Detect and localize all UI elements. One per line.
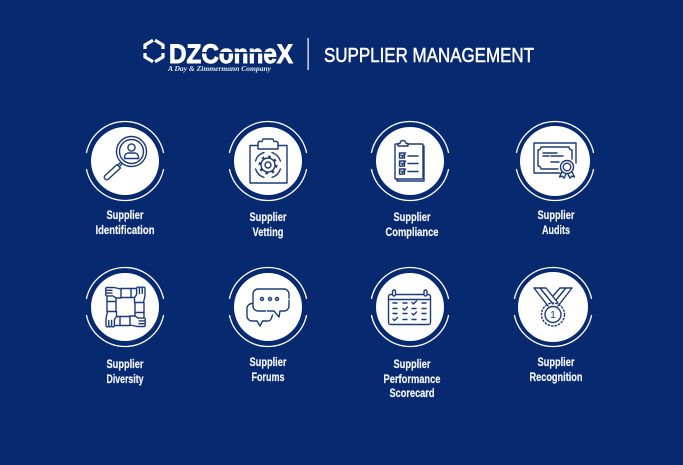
label [530,355,582,384]
label: Scorecard [390,386,434,400]
label: Recognition [530,370,582,384]
icon badge: clipboard with gear [229,121,307,201]
panel: supplier audits [516,121,594,237]
panel: supplier recognition [514,267,592,384]
panel: supplier performance scorecard [371,267,449,400]
label [106,357,144,386]
header: logo and title [145,38,534,73]
label [538,208,575,237]
panel: supplier identification [86,121,164,237]
label [250,210,287,239]
label: Diversity [106,372,144,386]
label: Forums [252,370,285,384]
label [250,355,287,384]
label: Supplier [250,210,287,224]
label: Vetting [252,225,284,239]
icon badge: magnifier [86,121,164,201]
label: Supplier [538,208,575,222]
label: Supplier [394,357,431,371]
panel: supplier forums [229,267,307,384]
logo icon: hexagon [145,40,163,62]
panel: supplier diversity [86,267,164,386]
icon badge: chat bubbles [229,267,307,347]
logo wordmark: DZConneX [169,39,293,69]
label: Supplier [394,210,431,224]
label [386,210,439,239]
label: Supplier [250,355,287,369]
title: SUPPLIER MANAGEMENT [324,45,534,67]
label: Performance [384,372,441,386]
label: Identification [96,223,154,237]
icon badge: checklist [371,121,449,201]
label [384,357,441,400]
label [96,208,154,237]
logo tagline: A Day & Zimmermann Company [167,64,272,73]
label: Audits [542,223,570,237]
panel: supplier compliance [371,121,449,239]
label: Supplier [538,355,575,369]
icon badge: certificate [516,121,594,201]
panel: supplier vetting [229,121,307,239]
icon badge: calendar [371,267,449,347]
label: Compliance [386,225,439,239]
icon badge: linked hands [86,267,164,347]
label: Supplier [106,357,144,371]
label: Supplier [106,208,144,222]
medal number: 1 [550,310,556,321]
